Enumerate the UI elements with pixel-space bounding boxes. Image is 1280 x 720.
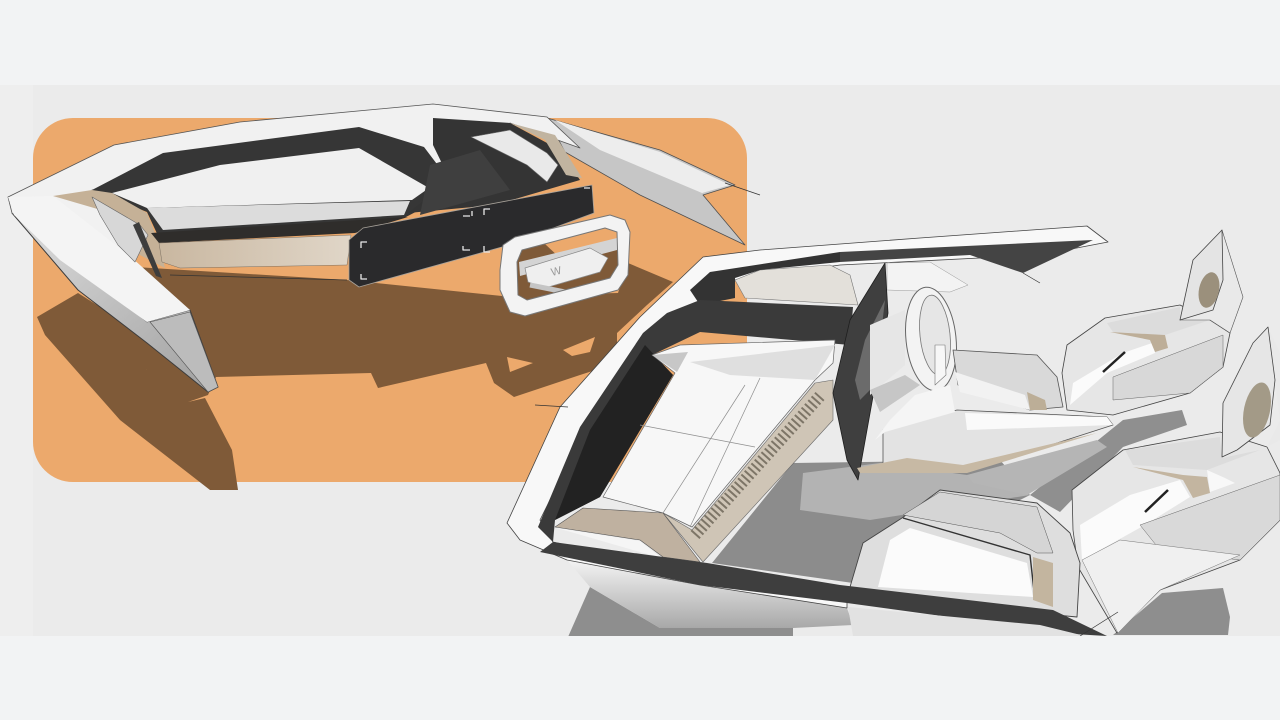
white screen: [112, 148, 429, 208]
dark band and tan strip: [151, 217, 408, 243]
illustration: full interior sketch: [170, 183, 1280, 637]
floor shadows: [568, 587, 793, 637]
dark lower band: [540, 542, 1107, 636]
sketch lines: [170, 183, 1118, 636]
central screen: [603, 340, 835, 527]
lower body: [567, 560, 853, 628]
upper dash area: [887, 262, 968, 292]
steering wheel: [901, 285, 961, 393]
illustration: dashboard sketch: [8, 104, 745, 392]
seat: rear lower: [1072, 327, 1280, 633]
seat: front passenger: [850, 490, 1080, 617]
steering wheel: W: [550, 265, 563, 279]
steering wheel: [500, 215, 630, 316]
dark inner frame: [538, 300, 853, 542]
dark upright display: [833, 263, 888, 480]
shadow: dashboard cast shadow: [37, 263, 673, 490]
seat: rear upper: [1062, 230, 1243, 415]
tan left trim: [53, 190, 165, 268]
outer shell: [507, 226, 1108, 608]
upper shell: [8, 104, 580, 322]
right wing: [547, 118, 745, 245]
tan slatted console: [663, 380, 833, 562]
dark console: [408, 118, 580, 213]
front driver seat: [857, 350, 1113, 473]
panel: orange backdrop: [33, 118, 747, 482]
left wing underside: [12, 213, 218, 392]
black control panel: [349, 185, 594, 287]
